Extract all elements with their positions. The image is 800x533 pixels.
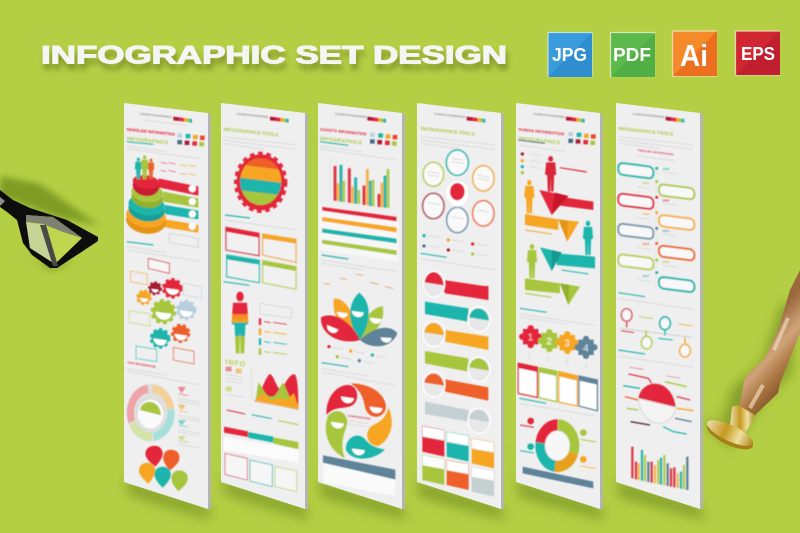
icon: Ai badge — [672, 31, 717, 76]
panel 6 sheet — [700, 113, 703, 509]
title: INFOGRAPHIC SET DESIGN — [41, 42, 507, 70]
panel 6 timeline: 2016 — [663, 260, 670, 264]
panel 3 bar chart — [320, 112, 398, 288]
panel 5 puzzle and donut: 2 — [546, 337, 552, 348]
panel 4 — [417, 103, 504, 509]
panel 6 timeline — [618, 112, 694, 297]
panel 3 bar chart: ELEMENTS INFOGRAPHICS — [335, 112, 367, 119]
panel 5 people diagram — [518, 112, 596, 305]
icon: glasses — [0, 176, 100, 272]
panel 1 — [124, 103, 211, 509]
icon: JPG badge: JPG — [552, 45, 587, 65]
panel 1 top section: INFOGRAPHICS — [126, 136, 169, 146]
panel 5 puzzle and donut — [518, 308, 598, 488]
panel 4 circle diagram: INFOGRAPHICS TOOLS — [421, 126, 475, 137]
icon: EPS badge — [736, 31, 780, 75]
panel 1 sheet — [208, 113, 211, 509]
panel 2 top section — [223, 112, 297, 289]
icon: PDF badge: PDF — [613, 45, 651, 65]
panel 4 circle diagram: ELEMENTS INFOGRAPHICS — [434, 112, 466, 119]
panel 4 circle diagram — [421, 112, 495, 300]
panel 1 gears and ring: STEP INFORMATION — [127, 360, 156, 369]
panel 5 people diagram: ELEMENTS INFOGRAPHICS — [533, 112, 565, 119]
icon: PDF badge — [610, 32, 655, 77]
panel 5 — [516, 103, 603, 509]
icon: Ai badge: Ai — [680, 38, 708, 73]
icon: wax stamp — [700, 270, 800, 455]
panel 6 timeline: INFOGRAPHICS TOOLS — [618, 126, 673, 137]
panel 3 flower and swirl — [321, 293, 397, 496]
panel 6 timeline: 2017 — [643, 274, 650, 278]
panel shadows — [112, 440, 705, 520]
panel 1 top section: ELEMENTS INFOGRAPHICS — [140, 112, 172, 119]
panel 4 option rows — [422, 286, 494, 497]
panel 6 timeline: TIMELINE INFOGRAPHIC — [637, 148, 674, 156]
panel 6 timeline: 2014 — [663, 229, 670, 233]
panel 5 people diagram: HUMAN INFORMATION — [518, 127, 565, 136]
panel 2 lower section: INFO — [225, 359, 246, 368]
panel 5 sheet — [600, 113, 603, 509]
icon: EPS badge: EPS — [741, 44, 775, 64]
panel 6 timeline: 2012 — [663, 198, 670, 202]
panel 6 pins dome and bars — [618, 298, 693, 490]
panel 5 puzzle and donut: 1 — [528, 333, 534, 344]
panel 6 timeline: 2013 — [643, 212, 650, 216]
panel 6 timeline: 2015 — [643, 242, 650, 246]
panel 2 top section: INFOGRAPHICS TOOLS — [223, 127, 278, 137]
panel 1 top section: NEWSLINE INFORMATION — [127, 127, 175, 137]
panel 2 lower section — [224, 292, 298, 492]
panel 6 timeline: 2010 — [663, 167, 670, 171]
panel 1 top section — [124, 112, 205, 298]
icon: JPG badge — [548, 32, 592, 77]
panel 5 puzzle and donut: 4 — [583, 343, 589, 354]
panel 2 sheet — [305, 113, 308, 509]
panel 5 people diagram: INFOGRAPHICS — [518, 136, 561, 146]
panel 2 top section: ELEMENTS INFOGRAPHICS — [237, 112, 269, 119]
panel 3 sheet — [402, 113, 405, 509]
panel 3 bar chart: INFOGRAPHICS — [320, 136, 363, 146]
panel 1 gears and ring — [124, 280, 200, 492]
panel 2 — [221, 103, 308, 509]
panel 4 sheet — [501, 113, 504, 509]
panel 6 timeline: 2011 — [643, 181, 649, 185]
panel 3 — [318, 103, 405, 509]
panel 6 — [616, 103, 703, 509]
panel 6 timeline: ELEMENTS INFOGRAPHICS — [633, 112, 665, 119]
panel 5 puzzle and donut: 3 — [564, 339, 570, 350]
panel 3 bar chart: CHARTS INFORMATION — [320, 127, 367, 137]
panel 3 flower and swirl: CORPORATION — [348, 414, 371, 421]
